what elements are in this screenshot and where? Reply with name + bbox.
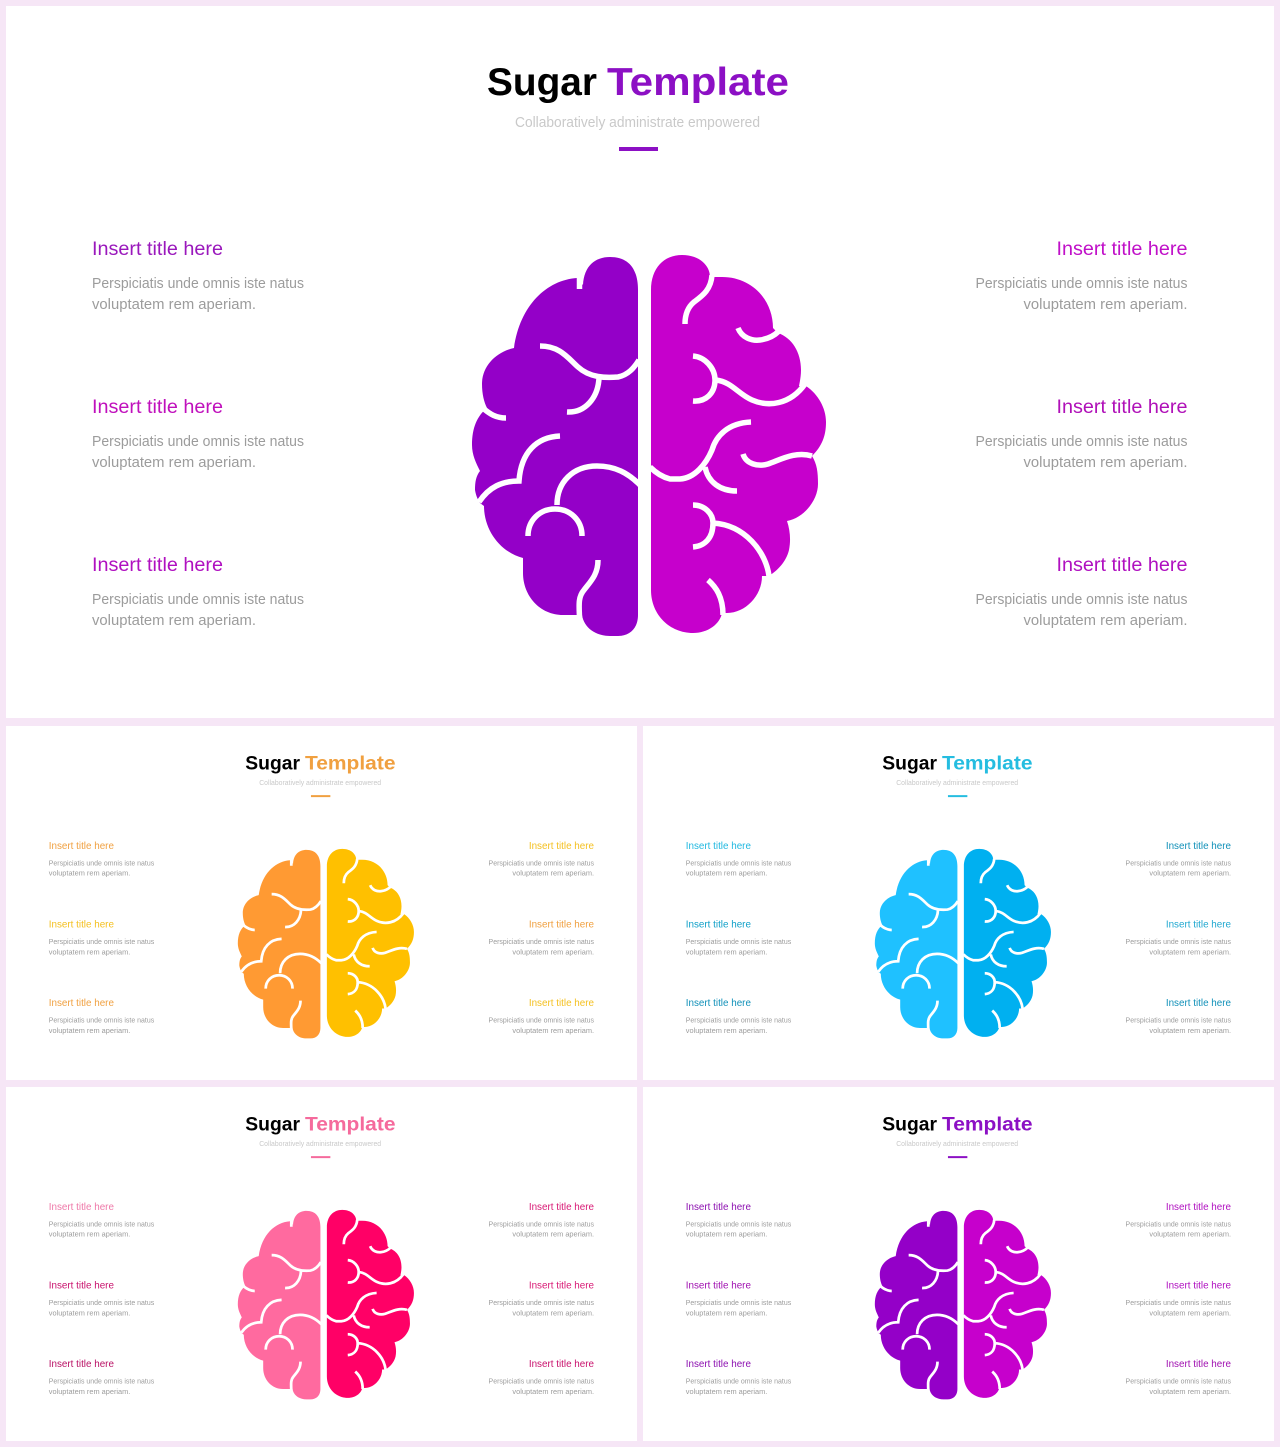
text block: right 3: Perspiciatis unde omnis iste natus [1126, 1015, 1231, 1024]
title: Template [305, 752, 396, 774]
text block: right 2: Insert title here [1056, 396, 1188, 418]
icon: brain right hemisphere [326, 849, 414, 1037]
text block: right 3: Perspiciatis unde omnis iste natus [489, 1376, 594, 1385]
title: Sugar [882, 752, 937, 774]
text block: right 2: Perspiciatis unde omnis iste natus [1126, 1298, 1231, 1307]
text block: right 2 [489, 919, 594, 956]
subtitle: Collaboratively administrate empowered [259, 778, 381, 787]
text block: left 2: voluptatem rem aperiam. [49, 1308, 130, 1317]
icon: brain left hemisphere [238, 1211, 321, 1399]
text block: left 2: voluptatem rem aperiam. [686, 947, 767, 956]
title [882, 1113, 1033, 1135]
text block: left 1: Perspiciatis unde omnis iste natus [686, 858, 792, 867]
text block: right 3 [1126, 1359, 1231, 1396]
text block: right 3: Insert title here [1056, 554, 1188, 576]
text block: left 3: Insert title here [686, 1359, 751, 1370]
icon: brain right hemisphere [650, 255, 826, 633]
text block: right 2: voluptatem rem aperiam. [512, 947, 594, 956]
text block: right 2 [489, 1280, 594, 1317]
text block: right 1 [976, 238, 1188, 313]
text block: left 3: voluptatem rem aperiam. [49, 1387, 130, 1396]
text block: right 3: Insert title here [1166, 998, 1231, 1009]
text block: left 1: Insert title here [49, 841, 114, 852]
text block: left 2 [686, 919, 792, 956]
text block: left 2 [49, 1280, 155, 1317]
text block: right 1: voluptatem rem aperiam. [1024, 297, 1188, 313]
text block: left 2: Perspiciatis unde omnis iste natus [49, 1298, 155, 1307]
text block: right 1 [1126, 1202, 1231, 1239]
text block: left 3: Perspiciatis unde omnis iste natus [92, 592, 304, 608]
text block: left 2: Insert title here [49, 1280, 114, 1291]
title rule [619, 147, 658, 151]
text block: left 3: Perspiciatis unde omnis iste natus [49, 1015, 155, 1024]
text block: left 1: Insert title here [686, 1202, 751, 1213]
title [245, 1113, 396, 1135]
text block: right 1: Insert title here [1056, 238, 1188, 260]
text block: left 3 [686, 1359, 792, 1396]
text block: left 3: Insert title here [49, 1359, 114, 1370]
text block: left 1 [92, 238, 304, 313]
text block: left 2: Insert title here [92, 396, 223, 418]
text block: left 1: Perspiciatis unde omnis iste natus [49, 858, 155, 867]
text block: right 1: voluptatem rem aperiam. [512, 869, 594, 878]
text block: right 1: Insert title here [1166, 841, 1231, 852]
text block: right 3: Insert title here [529, 998, 594, 1009]
text block: right 1 [1126, 841, 1231, 878]
text block: right 2: Perspiciatis unde omnis iste natus [489, 1298, 594, 1307]
icon: brain left hemisphere [875, 1211, 958, 1399]
text block: right 3: voluptatem rem aperiam. [1024, 613, 1188, 629]
subtitle: Collaboratively administrate empowered [896, 1139, 1018, 1148]
text block: left 1: Insert title here [49, 1202, 114, 1213]
text block: left 3: voluptatem rem aperiam. [686, 1026, 767, 1035]
panel: pink slide [6, 1087, 637, 1441]
text block: right 1: Insert title here [529, 841, 594, 852]
text block: right 1: Perspiciatis unde omnis iste natus [1126, 858, 1231, 867]
text block: left 3 [49, 1359, 155, 1396]
title rule [948, 1156, 967, 1158]
title [487, 61, 789, 104]
text block: left 2 [92, 396, 304, 471]
text block: right 2: Perspiciatis unde omnis iste natus [489, 937, 594, 946]
text block: left 1 [686, 1202, 792, 1239]
text block: right 2: Insert title here [529, 919, 594, 930]
text block: left 3 [49, 998, 155, 1035]
text block: right 1: Insert title here [1166, 1202, 1231, 1213]
text block: left 2: Insert title here [686, 919, 751, 930]
text block: right 3: Perspiciatis unde omnis iste natus [1126, 1376, 1231, 1385]
icon: brain left hemisphere [238, 850, 321, 1038]
text block: left 2 [686, 1280, 792, 1317]
text block: left 2: Perspiciatis unde omnis iste natus [686, 937, 792, 946]
text block: right 2 [1126, 919, 1231, 956]
text block: left 1: Perspiciatis unde omnis iste natus [49, 1219, 155, 1228]
text block: left 1 [49, 1202, 155, 1239]
text block: left 1: voluptatem rem aperiam. [49, 869, 130, 878]
text block: left 3: Perspiciatis unde omnis iste natus [49, 1376, 155, 1385]
text block: right 3: voluptatem rem aperiam. [512, 1387, 594, 1396]
text block: right 2: voluptatem rem aperiam. [1149, 1308, 1231, 1317]
text block: left 3: voluptatem rem aperiam. [686, 1387, 767, 1396]
text block: right 2: Perspiciatis unde omnis iste natus [1126, 937, 1231, 946]
text block: right 3 [976, 554, 1188, 629]
text block: left 2: Perspiciatis unde omnis iste natus [686, 1298, 792, 1307]
text block: left 1: voluptatem rem aperiam. [686, 869, 767, 878]
text block: right 2 [1126, 1280, 1231, 1317]
title: Sugar [245, 1113, 300, 1135]
title: Sugar [245, 752, 300, 774]
subtitle: Collaboratively administrate empowered [896, 778, 1018, 787]
panel: blue slide [643, 726, 1274, 1080]
text block: right 3: voluptatem rem aperiam. [512, 1026, 594, 1035]
title: Sugar [487, 61, 597, 104]
text block: right 2: Insert title here [529, 1280, 594, 1291]
text block: left 2: voluptatem rem aperiam. [92, 455, 256, 471]
title: Template [942, 1113, 1033, 1135]
text block: left 2: voluptatem rem aperiam. [49, 947, 130, 956]
text block: right 3: Insert title here [529, 1359, 594, 1370]
text block: left 2: Perspiciatis unde omnis iste natus [49, 937, 155, 946]
text block: left 3: Perspiciatis unde omnis iste natus [686, 1376, 792, 1385]
panel: main purple slide [6, 6, 1274, 718]
text block: left 1: Perspiciatis unde omnis iste natus [92, 276, 304, 292]
text block: left 1 [49, 841, 155, 878]
subtitle: Collaboratively administrate empowered [259, 1139, 381, 1148]
text block: right 2: voluptatem rem aperiam. [1149, 947, 1231, 956]
text block: right 1: Perspiciatis unde omnis iste natus [1126, 1219, 1231, 1228]
subtitle: Collaboratively administrate empowered [515, 115, 760, 131]
text block: right 1 [489, 1202, 594, 1239]
text block: left 3: Perspiciatis unde omnis iste natus [686, 1015, 792, 1024]
title: Template [607, 61, 789, 104]
text block: left 2: voluptatem rem aperiam. [686, 1308, 767, 1317]
text block: left 3 [92, 554, 304, 629]
title rule [311, 795, 330, 797]
icon: brain left hemisphere [875, 850, 958, 1038]
text block: left 3: voluptatem rem aperiam. [92, 613, 256, 629]
title: Template [942, 752, 1033, 774]
icon: brain right hemisphere [963, 1210, 1051, 1398]
text block: right 2: Insert title here [1166, 1280, 1231, 1291]
text block: left 2: Insert title here [49, 919, 114, 930]
title rule [948, 795, 967, 797]
text block: right 3 [489, 1359, 594, 1396]
text block: right 3: Insert title here [1166, 1359, 1231, 1370]
panel: orange slide [6, 726, 637, 1080]
text block: left 3 [686, 998, 792, 1035]
text block: left 1: Perspiciatis unde omnis iste natus [686, 1219, 792, 1228]
text block: right 3: Perspiciatis unde omnis iste natus [489, 1015, 594, 1024]
text block: left 3: voluptatem rem aperiam. [49, 1026, 130, 1035]
text block: left 3: Insert title here [49, 998, 114, 1009]
text block: right 2: Perspiciatis unde omnis iste natus [976, 434, 1188, 450]
title [882, 752, 1033, 774]
text block: left 1: voluptatem rem aperiam. [686, 1230, 767, 1239]
text block: right 3 [489, 998, 594, 1035]
text block: left 3: Insert title here [686, 998, 751, 1009]
text block: right 3: voluptatem rem aperiam. [1149, 1387, 1231, 1396]
title [245, 752, 396, 774]
panel: purple slide [643, 1087, 1274, 1441]
icon: brain left hemisphere [472, 257, 640, 636]
text block: left 1: Insert title here [686, 841, 751, 852]
text block: right 1: Perspiciatis unde omnis iste natus [489, 1219, 594, 1228]
text block: right 3 [1126, 998, 1231, 1035]
text block: right 2 [976, 396, 1188, 471]
title: Sugar [882, 1113, 937, 1135]
text block: right 1: voluptatem rem aperiam. [512, 1230, 594, 1239]
text block: left 1: voluptatem rem aperiam. [49, 1230, 130, 1239]
text block: right 3: voluptatem rem aperiam. [1149, 1026, 1231, 1035]
text block: left 1: voluptatem rem aperiam. [92, 297, 256, 313]
title: Template [305, 1113, 396, 1135]
text block: right 1: Perspiciatis unde omnis iste natus [489, 858, 594, 867]
text block: left 1 [686, 841, 792, 878]
text block: right 1: Insert title here [529, 1202, 594, 1213]
text block: left 3: Insert title here [92, 554, 223, 576]
text block: right 1: voluptatem rem aperiam. [1149, 869, 1231, 878]
text block: right 1 [489, 841, 594, 878]
text block: right 2: voluptatem rem aperiam. [512, 1308, 594, 1317]
text block: left 2: Perspiciatis unde omnis iste natus [92, 434, 304, 450]
title rule [311, 1156, 330, 1158]
text block: right 2: voluptatem rem aperiam. [1024, 455, 1188, 471]
text block: right 1: Perspiciatis unde omnis iste natus [976, 276, 1188, 292]
text block: right 2: Insert title here [1166, 919, 1231, 930]
text block: left 1: Insert title here [92, 238, 223, 260]
text block: left 2 [49, 919, 155, 956]
text block: right 3: Perspiciatis unde omnis iste natus [976, 592, 1188, 608]
icon: brain right hemisphere [963, 849, 1051, 1037]
text block: left 2: Insert title here [686, 1280, 751, 1291]
icon: brain right hemisphere [326, 1210, 414, 1398]
text block: right 1: voluptatem rem aperiam. [1149, 1230, 1231, 1239]
